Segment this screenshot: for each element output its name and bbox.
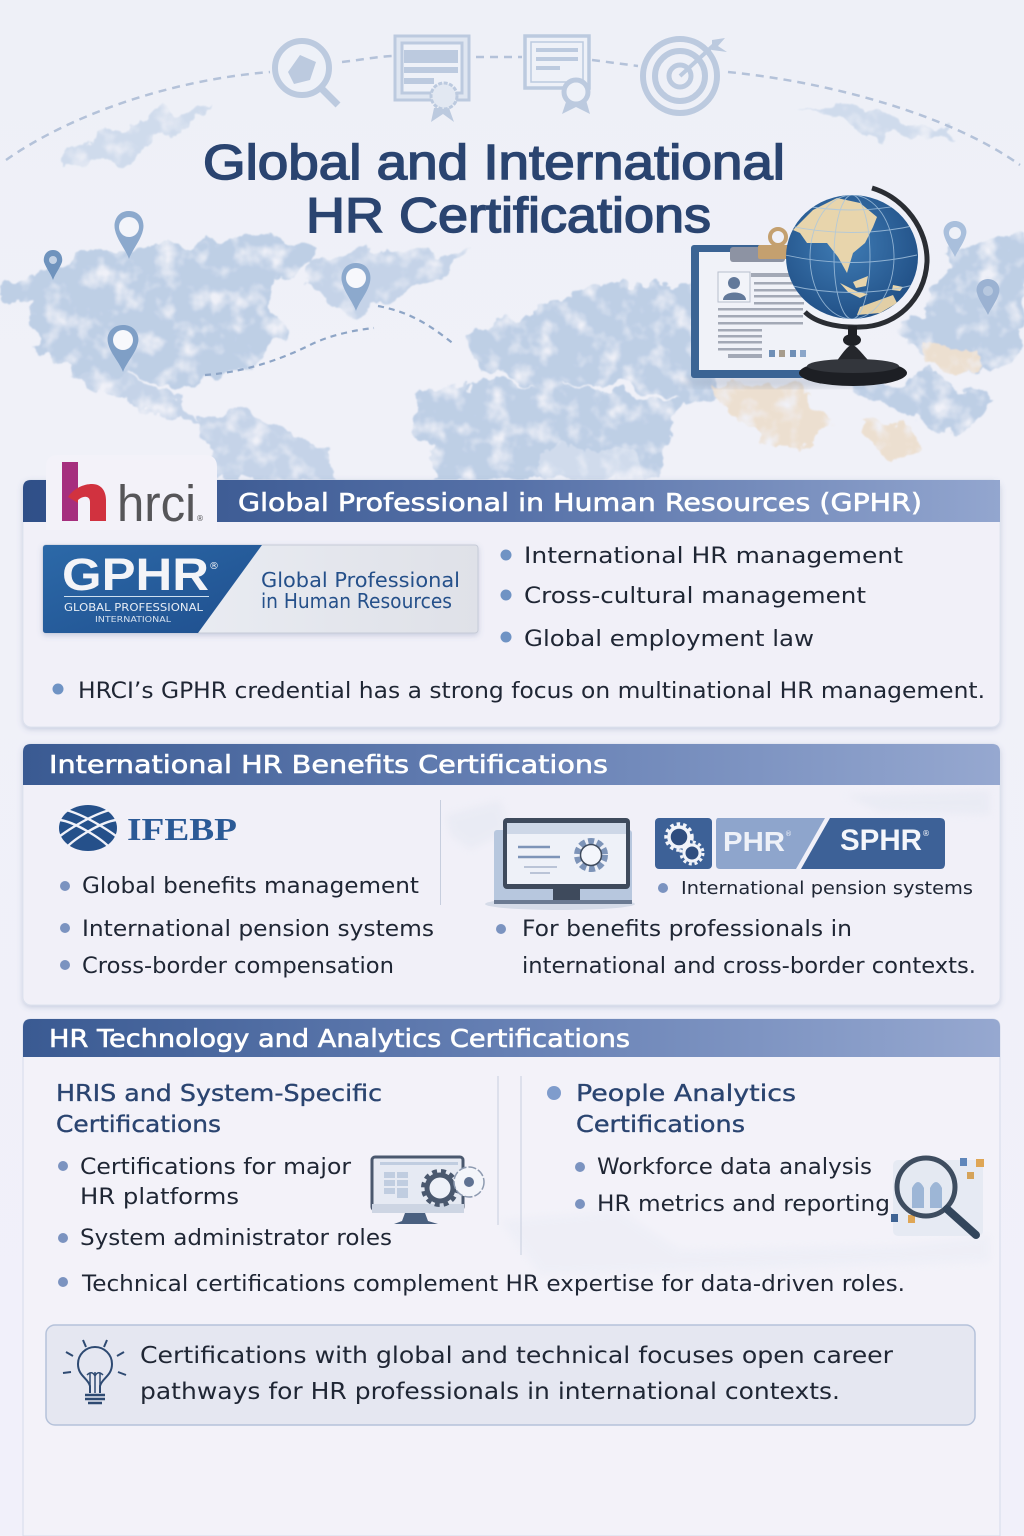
analytics bullet list: HR metrics and reporting — [597, 1192, 890, 1217]
benefits professionals note: international and cross-border contexts. — [522, 954, 976, 979]
GPHR badge: GPHR — [62, 549, 209, 600]
callout: Certifications with global and technical focuses open career — [140, 1343, 894, 1369]
dashed route arcs — [6, 56, 1020, 165]
PHR and SPHR badge: ® — [785, 830, 792, 838]
logo: hrci: ® — [196, 514, 204, 523]
icon: monitor with gear — [485, 818, 635, 910]
icon: certificate with seal — [395, 36, 469, 122]
GPHR badge — [43, 545, 478, 633]
section header bar — [23, 744, 1000, 785]
IFEBP bullet list: International pension systems — [82, 917, 434, 942]
analytics bullet list: Workforce data analysis — [597, 1155, 872, 1180]
callout — [46, 1325, 975, 1425]
PHR and SPHR badge: PHR — [723, 826, 785, 857]
HRIS bullet list: Certifications for major — [80, 1155, 352, 1180]
benefits professionals note — [496, 917, 976, 979]
section header bar: HR Technology and Analytics Certifications — [49, 1024, 630, 1053]
HRIS bullet list — [58, 1155, 392, 1251]
icon: target with arrow — [643, 38, 727, 113]
GPHR bullet list: International HR management — [524, 544, 903, 569]
GPHR note: HRCI’s GPHR credential has a strong focus on multinational HR management. — [78, 679, 985, 704]
GPHR bullet list: Global employment law — [524, 627, 814, 652]
IFEBP bullet list: Cross-border compensation — [82, 954, 394, 979]
title: Global and International — [203, 136, 785, 190]
GPHR bullet list: Cross-cultural management — [524, 584, 866, 609]
PHR bullet text: International pension systems — [681, 878, 973, 899]
title — [203, 136, 785, 243]
section header bar: International HR Benefits Certifications — [49, 750, 608, 779]
icon: HR system monitor — [372, 1157, 484, 1224]
logo: IFEBP — [59, 805, 237, 851]
technical note: Technical certifications complement HR expertise for data-driven roles. — [81, 1272, 905, 1297]
world map background — [0, 105, 1024, 482]
IFEBP bullet list — [60, 874, 434, 979]
PHR and SPHR badge — [655, 818, 945, 869]
PHR and SPHR badge: ® — [922, 829, 930, 838]
callout: pathways for HR professionals in international contexts. — [140, 1379, 840, 1405]
GPHR badge: GLOBAL PROFESSIONAL — [64, 601, 204, 614]
People Analytics heading: People Analytics — [576, 1081, 796, 1107]
icon: diploma with ribbon — [525, 36, 590, 114]
logo: IFEBP: IFEBP — [127, 811, 237, 847]
HRIS heading: Certifications — [56, 1112, 221, 1138]
illustration: clipboard and globe — [680, 188, 927, 388]
HRIS heading: HRIS and System-Specific — [56, 1081, 382, 1107]
HRIS bullet list: HR platforms — [80, 1185, 239, 1210]
logo: hrci: hrci — [117, 475, 196, 532]
GPHR badge: ® — [209, 561, 219, 572]
HRIS bullet list: System administrator roles — [80, 1226, 392, 1251]
icon: light bulb — [63, 1340, 126, 1403]
section header bar — [23, 480, 1000, 522]
HRIS heading — [56, 1081, 382, 1138]
GPHR bullet list — [500, 544, 903, 652]
People Analytics heading — [547, 1081, 796, 1138]
GPHR badge: INTERNATIONAL — [95, 615, 172, 624]
top icons row — [275, 36, 727, 122]
logo: hrci — [46, 455, 217, 532]
GPHR badge: in Human Resources — [261, 589, 452, 613]
icon: magnifier over charts — [891, 1156, 984, 1236]
PHR and SPHR badge: SPHR — [840, 824, 922, 857]
map location pins — [44, 211, 999, 372]
section header bar — [23, 1019, 1000, 1057]
title: HR Certifications — [306, 189, 711, 243]
panel: International HR Benefits — [23, 744, 1000, 1005]
IFEBP bullet list: Global benefits management — [82, 874, 419, 899]
dashed map route — [205, 306, 455, 375]
icon: resume clipboard — [680, 229, 880, 388]
benefits professionals note: For benefits professionals in — [522, 917, 852, 942]
GPHR badge: Global Professional — [261, 568, 460, 592]
section header bar: Global Professional in Human Resources (GPHR) — [238, 488, 922, 517]
icon: magnifier with globe — [275, 41, 338, 105]
panel: GPHR — [23, 455, 1000, 727]
analytics bullet list — [575, 1155, 890, 1217]
icon: desktop globe — [785, 188, 927, 386]
panel: HR Technology and Analytics — [23, 1019, 1000, 1536]
People Analytics heading: Certifications — [576, 1112, 745, 1138]
